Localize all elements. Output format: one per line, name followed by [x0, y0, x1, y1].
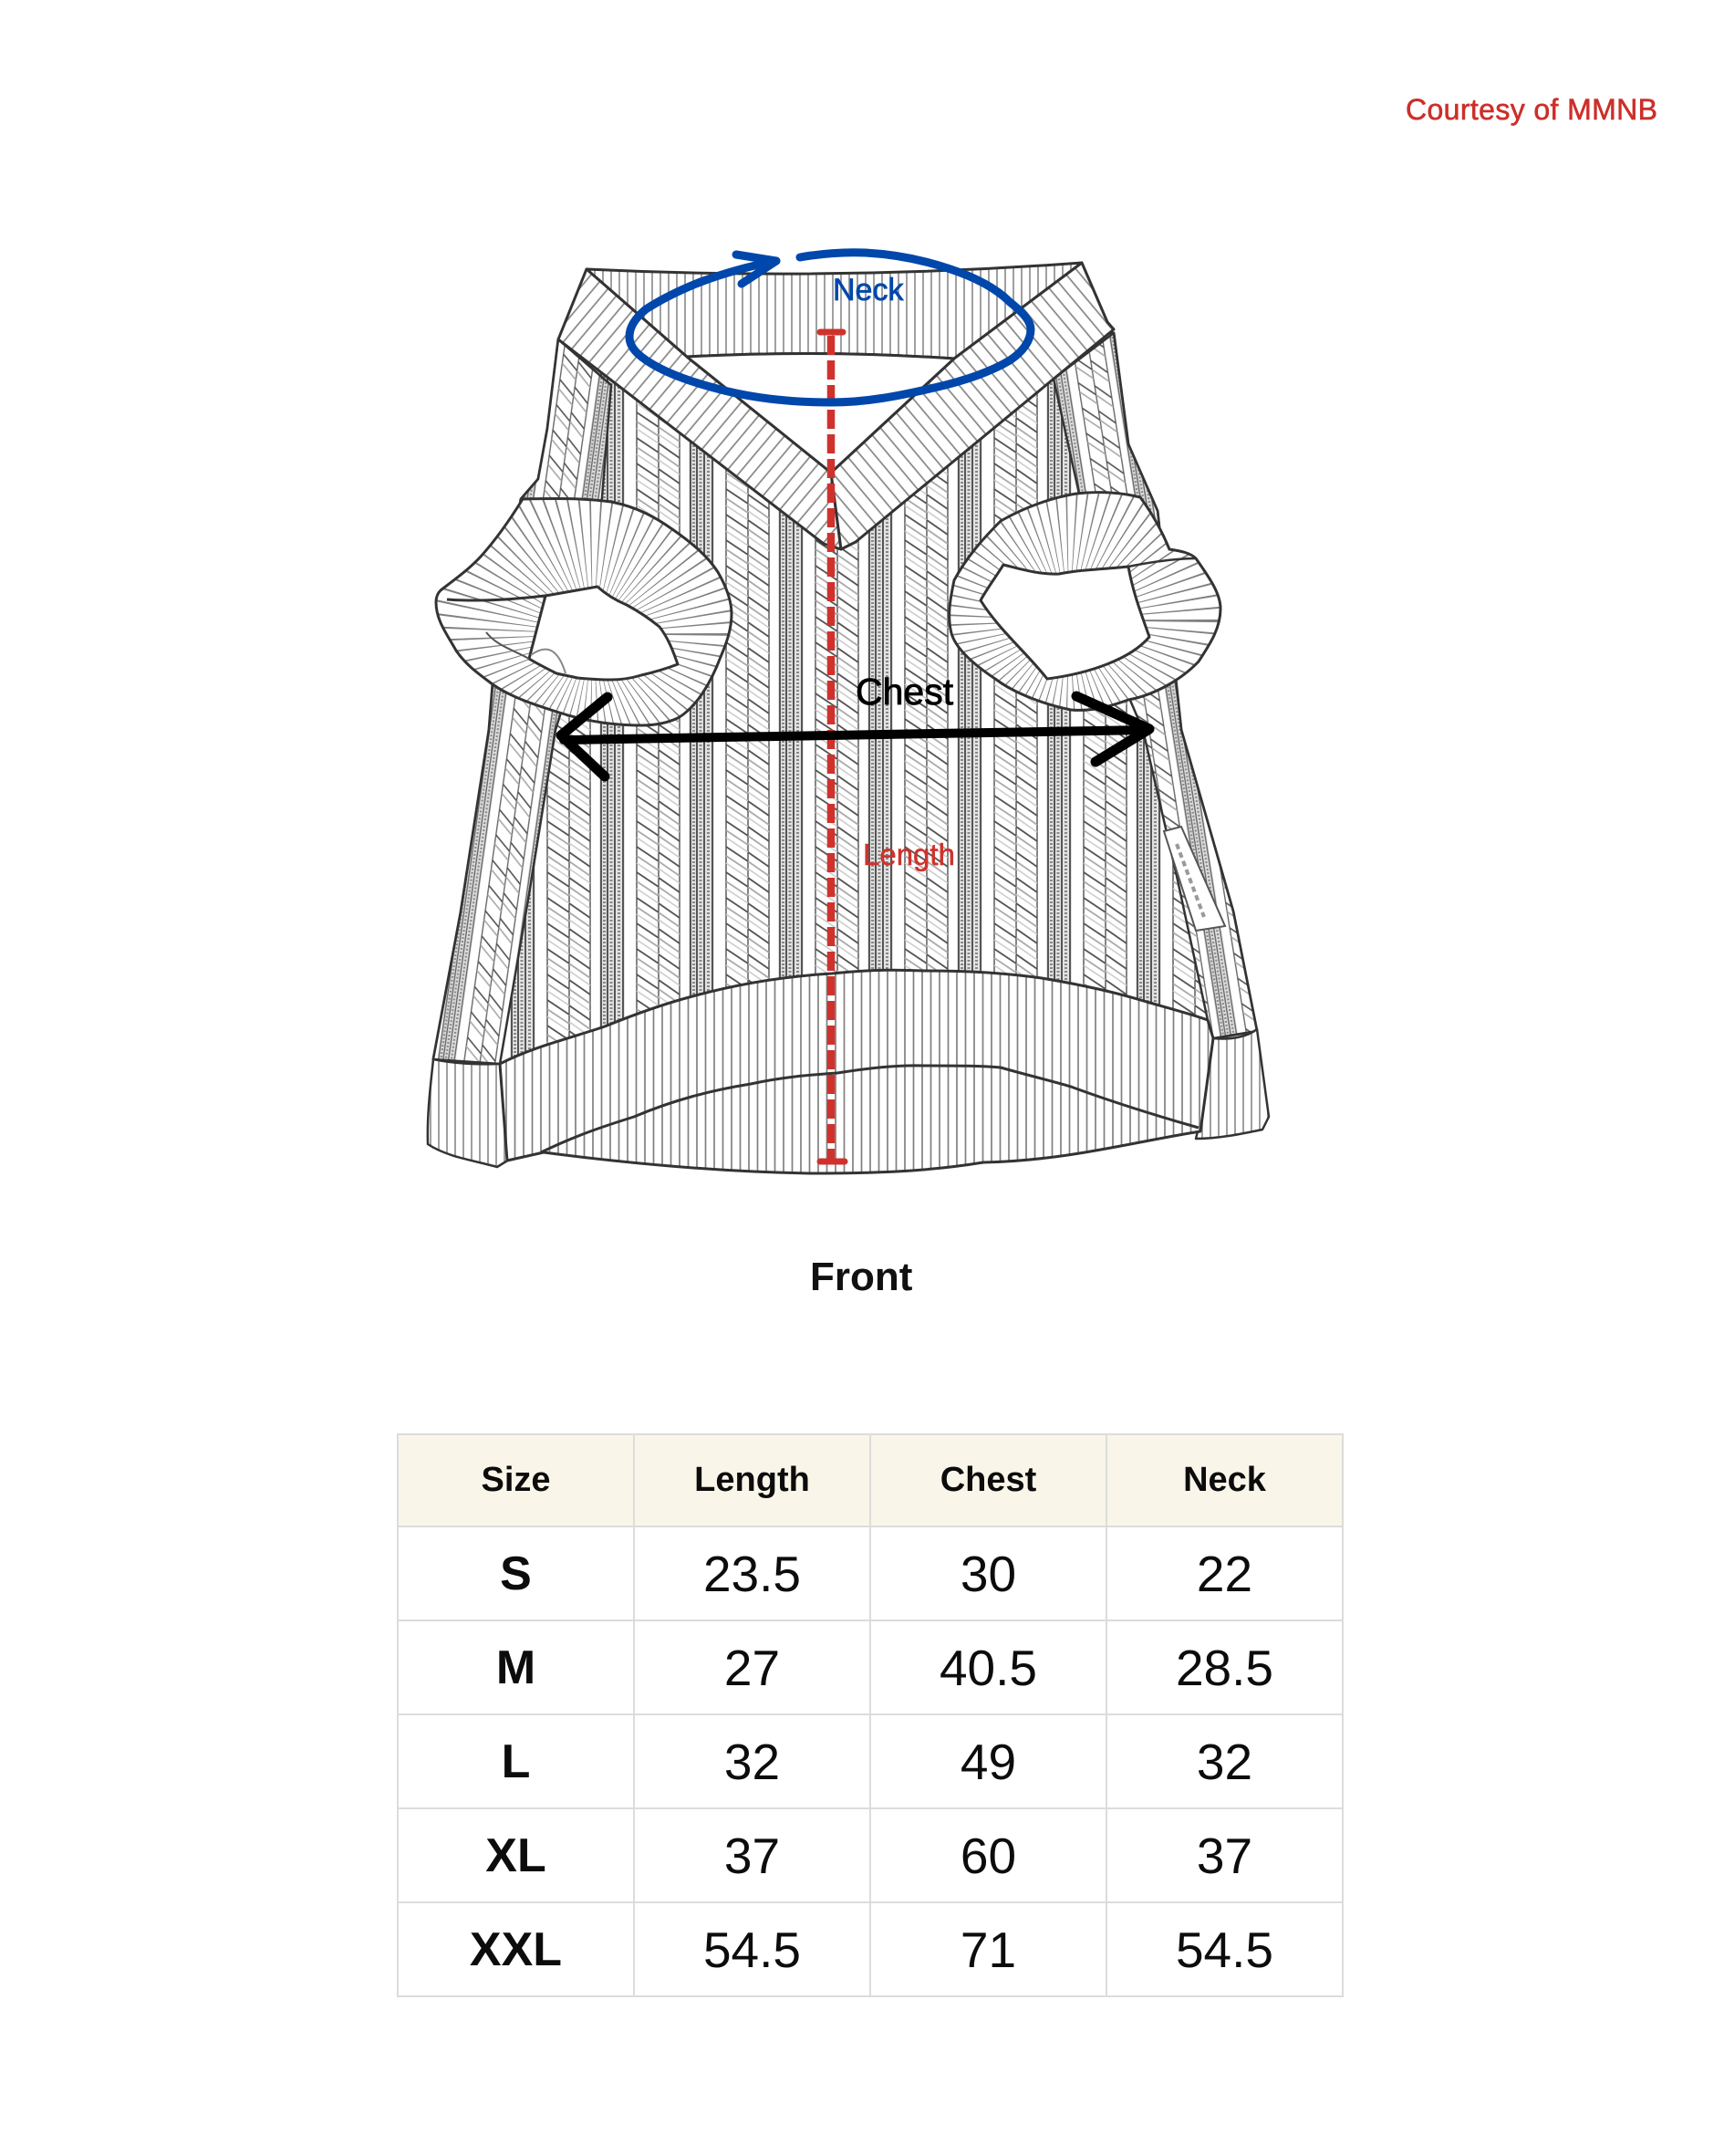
row: size S: 22 — [1197, 1546, 1252, 1602]
waistband fold — [541, 1066, 1199, 1152]
side care label — [1164, 827, 1225, 931]
row: size XXL: 54.5 — [1176, 1922, 1273, 1978]
row: size XL — [485, 1827, 1252, 1883]
label: length: Length — [863, 838, 955, 871]
row: size XXL — [470, 1922, 1273, 1978]
row: size S: 23.5 — [703, 1546, 801, 1602]
row: size L: 32 — [724, 1734, 780, 1790]
left lapel — [558, 269, 841, 549]
length measurement line — [820, 332, 845, 1161]
row: size XL: 37 — [1197, 1827, 1252, 1883]
row: size XXL: 71 — [961, 1922, 1016, 1978]
table header row: Chest — [940, 1461, 1036, 1499]
left armhole cuff — [429, 493, 739, 734]
row: size XL: 37 — [724, 1827, 780, 1883]
collar back — [587, 263, 1082, 359]
size chart table — [397, 1433, 1344, 1997]
row: size S — [500, 1546, 1252, 1602]
caption: front: Front — [810, 1255, 913, 1299]
row: size XXL: XXL — [470, 1923, 562, 1976]
row: size M: 40.5 — [940, 1639, 1037, 1695]
table header row: Neck — [1183, 1461, 1266, 1499]
right armhole cuff — [948, 491, 1222, 712]
row: size M: 28.5 — [1176, 1639, 1273, 1695]
row: size L: L — [502, 1735, 530, 1788]
row: size L — [502, 1734, 1252, 1790]
row: size M — [496, 1639, 1273, 1695]
row: size XXL: 54.5 — [703, 1922, 801, 1978]
table header row — [399, 1435, 1342, 1978]
sweater diagram with measurement annotations — [427, 98, 1656, 1290]
sweater body with cable knit — [433, 333, 1257, 1064]
row: size XL: 60 — [961, 1827, 1016, 1883]
credit: courtesy of MMNB: Courtesy of MMNB — [1406, 93, 1657, 126]
waistband — [500, 970, 1213, 1173]
row: size M: M — [496, 1640, 535, 1693]
label: chest: Chest — [856, 671, 954, 713]
right hem side — [1196, 1029, 1269, 1139]
table header row: Length — [694, 1461, 810, 1499]
chest measurement arrow — [561, 696, 1149, 776]
table header row: Size — [481, 1461, 551, 1499]
row: size XL: XL — [485, 1828, 546, 1881]
right lapel — [831, 263, 1114, 549]
row: size M: 27 — [724, 1639, 780, 1695]
row: size L: 49 — [961, 1734, 1016, 1790]
label: neck: Neck — [833, 273, 904, 307]
sweater illustration — [428, 263, 1269, 1173]
neck opening — [687, 353, 954, 473]
left side panel — [433, 339, 611, 1064]
row: size S: S — [500, 1547, 532, 1600]
row: size S: 30 — [961, 1546, 1016, 1602]
right side panel — [1054, 333, 1257, 1038]
row: size L: 32 — [1197, 1734, 1252, 1790]
neck measurement arrow — [629, 253, 1031, 402]
left hem side — [428, 1059, 509, 1167]
